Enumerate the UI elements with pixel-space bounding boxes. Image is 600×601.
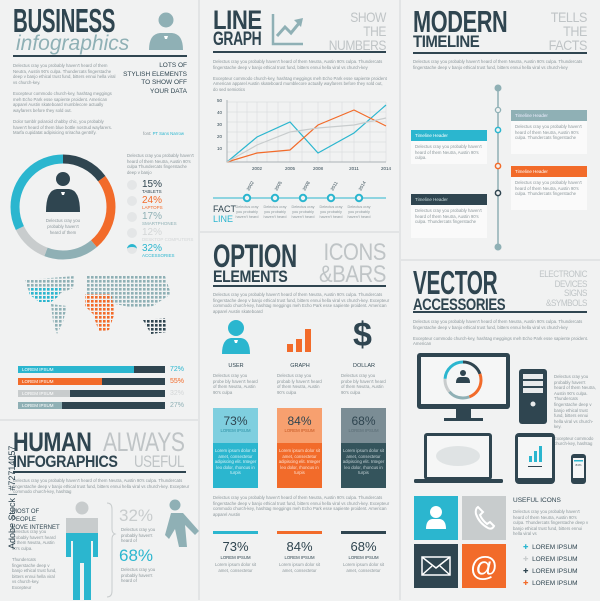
- icon tile: at sign: @: [470, 551, 498, 582]
- timeline card: dark left: Timeline Header: [415, 197, 448, 202]
- legend: device shares: LAPTOPS: [142, 205, 163, 210]
- brace: [107, 502, 116, 598]
- text block: Delectus cray you probably haven't heard of them Neutra, Austin 90's culpa. Thundercats fingerstache deep v banjo ethical trust fund, bitters ennui hella viral vs church-key: [413, 319, 582, 330]
- bar chart: lorem ipsum bars: LOREM IPSUM: [22, 403, 54, 408]
- callout: lots of stylish elements: [123, 62, 187, 94]
- line chart: 40: [217, 110, 222, 115]
- legend: device shares: 32%: [142, 243, 162, 254]
- fact line timeline: Delectus cray: [235, 205, 259, 209]
- bar chart: lorem ipsum bars: 27%: [170, 402, 184, 409]
- subtitle: show the numbers: THE: [363, 23, 386, 39]
- list: lorem ipsum bullets: ✚ LOREM IPSUM: [523, 580, 578, 587]
- stat bars: 73 84 68: 84%: [286, 539, 313, 554]
- list: lorem ipsum bullets: ✚ LOREM IPSUM: [523, 568, 578, 575]
- stat bars: 73 84 68: LOREM IPSUM: [348, 555, 379, 560]
- callout: lots of stylish elements: LOTS OF: [159, 62, 187, 69]
- fact line timeline: Delectus cray: [263, 205, 287, 209]
- stat boxes: 73 84 68: Lorem ipsum dolor sit amet, consectetur adipiscing elit. Integer leo dolor, rhoncus in turpis: [215, 448, 256, 475]
- text block: Delectus cray you probably haven't heard of them Neutra, Austin 90's culpa. Thundercats fingerstache deep v banjo ethical trust fund, bitters ennui hella viral vs church-key: [413, 59, 582, 70]
- panel: line graph: GRAPH: [213, 29, 261, 50]
- text block: Delectus cray you probably haven't heard of them Neutra, Austin 90's culpa. Thundercats fingerstache deep v banjo ethical trust fund, bitters ennui hella viral vs church-key. Excepteur commodo church-key, hashtag: [13, 478, 189, 494]
- icon: phone: [571, 454, 586, 484]
- timeline card: teal left: [411, 130, 487, 164]
- title: LINE GRAPH: LINE: [213, 5, 262, 35]
- subtitle: electronic devices signs & symbols: [539, 269, 587, 308]
- legend: device shares: ACCESSORIES: [142, 253, 175, 258]
- icon: pc tower: [519, 369, 547, 424]
- fact line timeline: Delectus cray: [347, 205, 371, 209]
- panel: vector accessories: ACCESSORIES: [413, 295, 505, 314]
- fact line timeline: haven't heard: [292, 215, 314, 219]
- donut chart: [10, 154, 116, 260]
- fact line timeline: haven't heard: [348, 215, 370, 219]
- list: lorem ipsum bullets: ✚ LOREM IPSUM: [523, 544, 578, 551]
- line chart: 10: [217, 146, 222, 151]
- stat: 32%: 32%: [119, 506, 153, 525]
- icon: human figure 32/68: [66, 502, 98, 600]
- icon: graph bars: [287, 329, 311, 352]
- title: BUSINESS: BUSINESS: [13, 2, 115, 39]
- line chart: 2011: [349, 166, 359, 171]
- icon tile: phone: [462, 496, 506, 540]
- fact line timeline: you probably: [292, 210, 314, 214]
- panel: human infographics: Delectus cray you probably haven't heard of: [121, 527, 155, 543]
- legend: device shares: TABLETS: [142, 189, 162, 194]
- fact line timeline: you probably: [348, 210, 370, 214]
- labels: user graph dollar: [213, 363, 386, 395]
- fact line timeline: 2014: [358, 180, 367, 192]
- icon tile: mail: [414, 544, 458, 588]
- legend: device shares: 15%: [142, 179, 162, 190]
- fact line timeline: you probably: [264, 210, 286, 214]
- subtitle: electronic devices signs & symbols: &SYMBOLS: [546, 298, 587, 308]
- stat bars: 73 84 68: Lorem ipsum dolor sit amet, consectetur: [343, 562, 384, 573]
- text block: Excepteur commodo church-key, hashtag meggings meh Echo Park esse sapiente proident. American: [413, 336, 588, 346]
- donut chart: Delectus cray you: [46, 218, 81, 223]
- stat boxes: 73 84 68: LOREM IPSUM: [348, 428, 379, 433]
- fact line timeline: you probably: [320, 210, 342, 214]
- bar chart: lorem ipsum bars: 72%: [170, 366, 184, 373]
- line chart: 20: [217, 134, 222, 139]
- donut chart: heard of them: [50, 230, 77, 235]
- panel: human infographics: USEFUL: [134, 452, 184, 471]
- labels: user graph dollar: Delectus cray you probe bly haven't heard of them Neutra, Austin 90's culpa: [341, 373, 386, 395]
- title: MODERN TIMELINE: MODERN: [413, 4, 507, 39]
- subtitle: show the numbers: NUMBERS: [329, 37, 386, 53]
- labels: user graph dollar: USER: [228, 363, 244, 369]
- subtitle: tells the facts: TELLS: [551, 9, 587, 25]
- line chart: 2014: [381, 166, 392, 171]
- subtitle: show the numbers: [329, 9, 386, 53]
- text block: Delectus cray you probably haven't heard of them Neutra, Austin 90's culpa. Thundercats fingerstache deep v banjo ethical trust fund, bitters ennui hella viral vs church-key.: [13, 63, 115, 85]
- labels: user graph dollar: GRAPH: [290, 363, 310, 369]
- subtitle: tells the facts: FACTS: [549, 37, 587, 53]
- timeline card: teal left: Timeline Header: [415, 133, 448, 138]
- line chart: [217, 98, 392, 171]
- text: font note: font: PT Sans Narrow: [143, 131, 184, 136]
- fact line timeline: LINE: [213, 214, 233, 224]
- fact line timeline: FACT: [213, 204, 237, 214]
- labels: user graph dollar: Delectus cray you probab ly haven't heard of them Neutra, Austin 90's culpa: [277, 373, 322, 395]
- list: lorem ipsum bullets: [523, 542, 588, 592]
- stat bars: 73 84 68: Lorem ipsum dolor sit amet, consectetur: [215, 562, 256, 573]
- subtitle: always useful: ALWAYS: [103, 427, 185, 457]
- subtitle: icons & bars: [319, 239, 386, 288]
- tiles: icon tiles: [414, 496, 506, 588]
- fact line timeline: 2005: [274, 180, 283, 192]
- fact line timeline: [213, 180, 386, 224]
- legend: device shares: 17%: [142, 211, 162, 222]
- text block: Dolor tumblr polaroid chabby chic, you probably haven't heard of them blue bottle nostrud wayfarers. Marfa cupidatat adipisicing sriracha gentrify.: [13, 119, 112, 135]
- text block: Delectus cray you probably haven't heard of them Neutra, Austin 90's culpa. Thundercats fingerstache deep v banjo ethical trust fund, bitters ennui hella viral vs church-key. Excepteur commodo church-key, hashtag meggings meh Echo Park esse sapiente proident. American apparel Austin skateboard: [213, 292, 389, 314]
- stat boxes: 73 84 68: 73%: [223, 414, 248, 428]
- fact line timeline: haven't heard: [236, 215, 258, 219]
- text block: [13, 63, 116, 135]
- timeline card: dark left: [411, 194, 487, 238]
- stat boxes: 73 84 68: [213, 408, 386, 488]
- panel: vector accessories: [413, 264, 596, 588]
- line chart: 2002: [252, 166, 263, 171]
- line chart: 50: [217, 98, 222, 103]
- subtitle: electronic devices signs & symbols: SIGNS: [564, 288, 587, 298]
- fact line timeline: 2011: [330, 180, 339, 192]
- panel: modern timeline: TIMELINE: [413, 32, 479, 51]
- stat boxes: 73 84 68: Lorem ipsum dolor sit amet, consectetur adipiscing elit. Integer leo dolor, rhoncus in turpis: [279, 448, 320, 475]
- stat boxes: 73 84 68: 68%: [351, 414, 376, 428]
- icon: tablet: [515, 433, 555, 484]
- panel: option elements: [213, 238, 390, 573]
- panel: business infographics: [10, 2, 194, 409]
- timeline card: gray right: Timeline Header: [515, 113, 548, 118]
- watermark: stock id: Adobe Stock | #72714057: [7, 446, 17, 549]
- stat bars: 73 84 68: 73%: [222, 539, 249, 554]
- subtitle: infographics: infographics: [16, 32, 129, 55]
- panel: human infographics: Delectus cray you probably haven't heard of: [121, 567, 155, 583]
- legend: device shares: SMARTPHONES: [142, 221, 177, 226]
- legend: device shares: 24%: [142, 195, 162, 206]
- donut chart: probably haven't: [47, 224, 80, 229]
- title: OPTION ELEMENTS: OPTION: [213, 238, 297, 274]
- line chart: 30: [217, 122, 222, 127]
- icon: graph arrow: [272, 14, 303, 46]
- text block: Delectus cray you probably haven't heard of them Neutra, Austin 90's culpa. Thundercats fingerstache deep v banjo ethical trust fund, bitters ennui hella viral vs church-key: [213, 59, 382, 70]
- fact line timeline: Delectus cray: [291, 205, 315, 209]
- text block: [213, 59, 387, 92]
- bar chart: lorem ipsum bars: LOREM IPSUM: [22, 367, 54, 372]
- callout: lots of stylish elements: YOUR DATA: [150, 88, 187, 94]
- title: VECTOR ACCESSORIES: VECTOR: [413, 264, 497, 301]
- legend: device shares: 12%: [142, 227, 162, 238]
- text block: donut note: Delectus cray you probably haven't heard of them Neutra, Austin 90's culpa Thundercats fingerstache deep v banjo: [127, 153, 194, 175]
- timeline card: teal left: Delectus cray you probably haven't heard of them Neutra, Austin 90's culpa.: [415, 144, 482, 160]
- fact line timeline: haven't heard: [320, 215, 342, 219]
- text block: Excepteur commodo church-key, hashtag meggings meh Echo Park esse sapiente proident American apparel Austin skateboard mumblecore actually wayfarers before they sold out, do sed semiotics: [213, 76, 387, 92]
- text block: Excepteur commodo church-key, hashtag meggings meh Echo Park esse sapiente proident. American apparel Austin skateboard mumblecore actually wayfarers before they sold out.: [13, 91, 112, 113]
- icon: laptop: [414, 433, 503, 483]
- text block: device note: Delectus cray you probably haven't heard of them Neutra, Austin 90's culpa. Thundercats fingerstache deep v banjo ethical trust fund, bitters ennui hella viral vs church-key.: [554, 374, 596, 429]
- bar chart: lorem ipsum bars: 32%: [170, 390, 184, 397]
- bar chart: lorem ipsum bars: LOREM IPSUM: [22, 379, 54, 384]
- labels: user graph dollar: Delectus cray you probe bly haven't heard of them Neutra, Austin 90's culpa: [213, 373, 258, 395]
- fact line timeline: haven't heard: [264, 215, 286, 219]
- stat: 68%: 68%: [119, 546, 153, 565]
- stat bars: 73 84 68: LOREM IPSUM: [284, 555, 315, 560]
- labels: user graph dollar: DOLLAR: [353, 363, 375, 369]
- stat bars: 73 84 68: LOREM IPSUM: [220, 555, 251, 560]
- panel: vector accessories: Delectus cray you probably haven't heard of them Neutra, Austin 90's culpa. Thundercats fingerstache deep v banjo ethical trust fund, bitters ennui hella viral vs: [513, 509, 588, 536]
- text: most of people love internet: [12, 508, 60, 531]
- fact line timeline: 2008: [302, 180, 311, 192]
- text: useful icons: USEFUL ICONS: [513, 497, 561, 504]
- subtitle: tells the facts: [549, 9, 587, 53]
- stat bars: 73 84 68: 68%: [350, 539, 377, 554]
- panel: human infographics: [7, 427, 199, 600]
- text block: Delectus cray you probably haven't heard of them Neutra, Austin 90's culpa. Thundercats fingerstache deep v banjo ethical trust fund, bitters ennui hella viral vs church-key. Excepteur commodo church-key, hashtag meggings meh Echo Park esse sapiente proident. American apparel Austin: [213, 495, 389, 517]
- text: most of people love internet: MOST OF PEOPLE: [12, 509, 39, 523]
- line chart: 2008: [313, 166, 324, 171]
- bar chart: lorem ipsum bars: [18, 366, 184, 409]
- timeline card: orange right: [511, 166, 587, 210]
- fact line timeline: 2002: [246, 180, 255, 192]
- timeline card: orange right: Delectus cray you probably haven't heard of them Neutra, Austin 90's culpa. Thundercats fingerstache: [515, 180, 582, 196]
- callout: lots of stylish elements: STYLISH ELEMENTS: [123, 70, 187, 78]
- panel: human infographics: Thundercats fingerstache deep v banjo ethical trust fund, bitters ennui hella viral vs church-key. Excepteur: [12, 557, 56, 590]
- bar chart: lorem ipsum bars: 55%: [170, 378, 184, 385]
- icon: walking figure: [165, 500, 199, 547]
- list: lorem ipsum bullets: ✚ LOREM IPSUM: [523, 556, 578, 563]
- icon: user: [222, 320, 250, 354]
- title: HUMAN INFOGRAPHICS: HUMAN: [13, 427, 91, 457]
- text: most of people love internet: LOVE INTERNET: [12, 525, 60, 531]
- icon: dollar: $: [353, 316, 372, 354]
- text block: device note: Excepteur commodo church-key, hashtag: [554, 436, 593, 446]
- icon: businessman: [149, 12, 183, 50]
- stat bars: 73 84 68: [213, 531, 386, 573]
- icon tile: user: [414, 496, 458, 540]
- panel: human infographics: Delectus cray you probably haven't heard of them Neutra, Austin 90's culpa.: [12, 529, 56, 551]
- stat boxes: 73 84 68: LOREM IPSUM: [284, 428, 315, 433]
- panel: option elements: ELEMENTS: [213, 267, 287, 286]
- stat boxes: 73 84 68: 84%: [287, 414, 312, 428]
- text block: [413, 319, 588, 346]
- stat bars: 73 84 68: Lorem ipsum dolor sit amet, consectetur: [279, 562, 320, 573]
- world map (dotted): [25, 276, 170, 334]
- subtitle: show the numbers: SHOW: [350, 9, 386, 25]
- icon: phone: 84%: [575, 463, 582, 467]
- timeline card: gray right: Delectus cray you probably haven't heard of them Neutra, Austin 90's culpa. Thundercats fingerstache: [515, 124, 582, 140]
- icon: monitor: [417, 353, 510, 421]
- timeline card: dark left: Delectus cray you probably haven't heard of them Neutra, Austin 90's culpa. Thundercats fingerstache: [415, 208, 482, 224]
- fact line timeline: you probably: [236, 210, 258, 214]
- subtitle: electronic devices signs & symbols: ELECTRONIC: [539, 269, 587, 279]
- panel: line graph: [213, 5, 392, 224]
- line chart: 2005: [285, 166, 296, 171]
- subtitle: icons & bars: ICONS: [324, 239, 386, 266]
- subtitle: tells the facts: THE: [563, 23, 587, 39]
- timeline axis: [494, 84, 502, 250]
- fact line timeline: Delectus cray: [319, 205, 343, 209]
- timeline card: gray right: [511, 110, 587, 154]
- stat boxes: 73 84 68: LOREM IPSUM: [220, 428, 251, 433]
- panel: modern timeline: [411, 4, 587, 250]
- stat boxes: 73 84 68: Lorem ipsum dolor sit amet, consectetur adipiscing elit. Integer leo dolor, rhoncus in turpis: [343, 448, 384, 475]
- subtitle: icons & bars: &BARS: [319, 261, 386, 288]
- subtitle: electronic devices signs & symbols: DEVICES: [555, 278, 587, 288]
- panel: human infographics: INFOGRAPHICS: [13, 452, 117, 471]
- callout: lots of stylish elements: TO SHOW OFF: [141, 79, 187, 86]
- legend: device shares: DESKTOP COMPUTERS: [142, 237, 193, 242]
- legend: device shares: [127, 179, 194, 258]
- timeline card: orange right: Timeline Header: [515, 169, 548, 174]
- bar chart: lorem ipsum bars: LOREM IPSUM: [22, 391, 54, 396]
- icon tile: at sign: [462, 544, 506, 588]
